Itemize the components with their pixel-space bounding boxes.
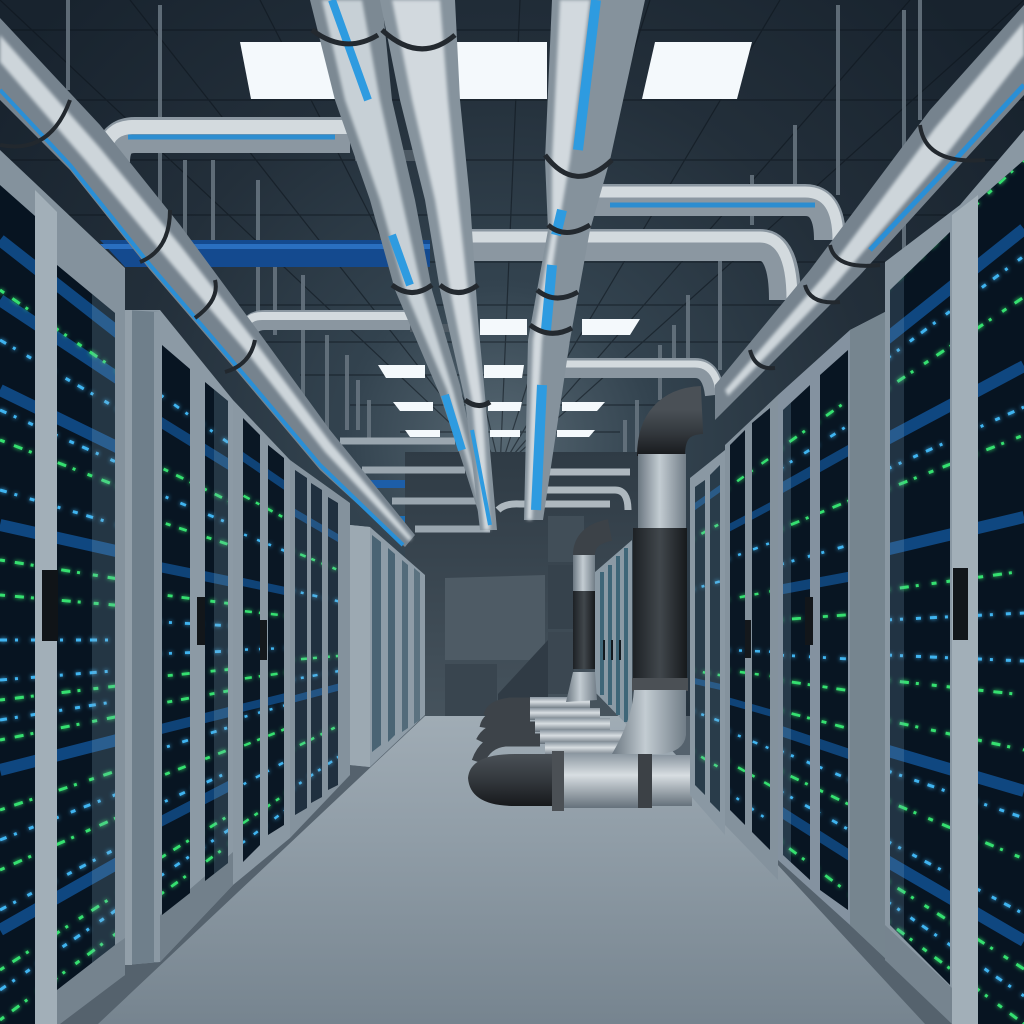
ceiling hanger rods xyxy=(68,0,920,470)
door handle xyxy=(745,620,751,658)
door handle xyxy=(197,597,205,645)
front floor pipe xyxy=(468,751,692,811)
right branch duct third xyxy=(555,364,719,395)
floor xyxy=(0,716,1024,1024)
rack row right, segment 3 xyxy=(725,390,778,880)
left branch duct lower xyxy=(242,316,412,345)
main pipe center A xyxy=(310,0,492,530)
rack row right, distant xyxy=(595,540,632,730)
left branch duct upper xyxy=(104,127,350,162)
main riser pipe xyxy=(612,410,702,754)
right branch duct upper xyxy=(580,192,838,240)
rack row right, segment 4 xyxy=(690,440,725,840)
back wall xyxy=(405,452,645,718)
branch ducts xyxy=(104,127,838,529)
main pipe right xyxy=(715,5,1024,420)
rack row left, segment 2 xyxy=(125,310,233,965)
rack row left, segment 4 xyxy=(290,460,350,838)
pipe brackets xyxy=(355,150,475,332)
main pipe center B xyxy=(380,0,497,530)
rack row left, segment 5 xyxy=(350,525,425,767)
ceiling xyxy=(0,0,1024,716)
floor pipes xyxy=(468,697,692,811)
main pipe left xyxy=(0,18,415,547)
distant right ducts xyxy=(498,472,630,510)
rack row right, segment 1 xyxy=(885,130,1024,1024)
door handle xyxy=(42,570,58,641)
stacked rear floor pipes xyxy=(478,697,625,762)
door handle xyxy=(260,620,267,660)
blue cable tray xyxy=(100,240,470,523)
ceiling lights xyxy=(240,42,752,437)
rack row left, segment 1 xyxy=(0,150,125,1024)
door handle xyxy=(805,597,813,645)
main pipe center C xyxy=(524,0,645,520)
rack row left, segment 3 xyxy=(233,400,290,885)
distant left ducts xyxy=(340,441,490,529)
second riser pipe xyxy=(566,530,610,702)
right branch duct lower xyxy=(465,237,792,300)
door handle xyxy=(953,568,968,640)
rack row right, segment 2 xyxy=(778,312,885,958)
